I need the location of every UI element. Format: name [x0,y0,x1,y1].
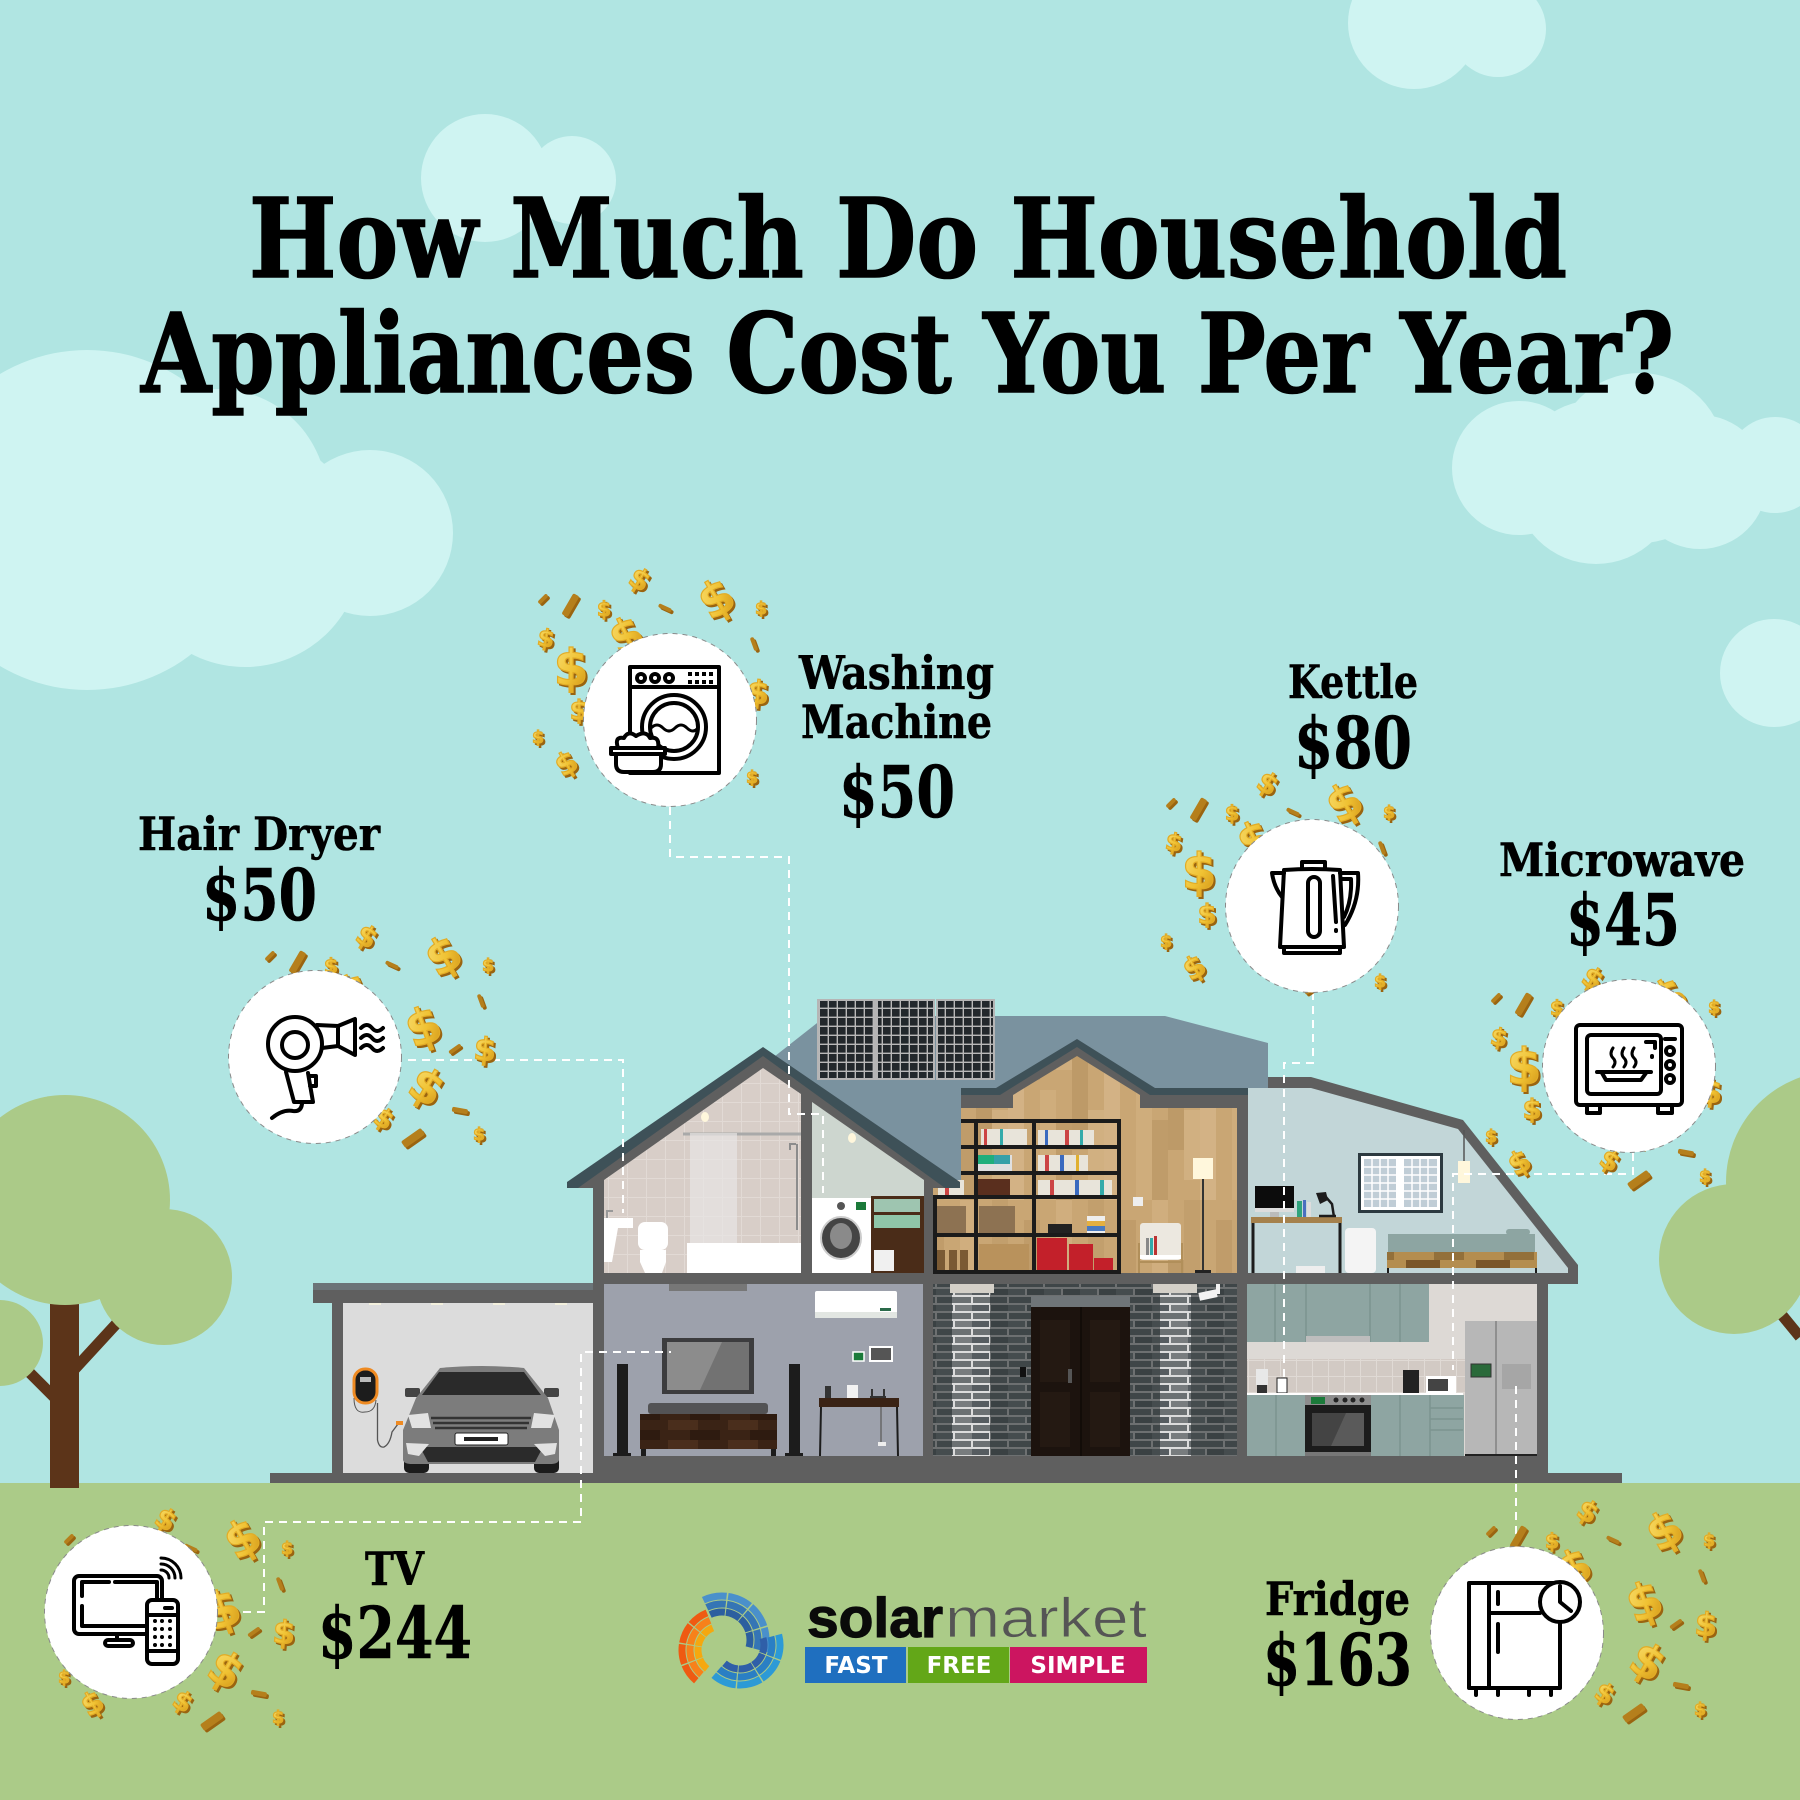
label: microwave [1499,833,1745,962]
dashed connector: washing machine [670,807,823,1193]
coin cluster: microwave: $ [1502,1143,1537,1184]
coin cluster: TV: $ [272,1708,284,1728]
air conditioner [815,1291,897,1318]
coin cluster: TV: $ [149,1500,182,1539]
label: hair dryer: Hair Dryer [138,807,381,861]
coin cluster: fridge: $ [1620,1630,1675,1693]
label: kettle: $80 [1294,701,1412,785]
bathtub [687,1243,801,1273]
logo wordmark [807,1586,1148,1649]
TV [662,1338,754,1394]
coin cluster: microwave: $ [1550,996,1564,1020]
coin cluster: kettle: $ [1251,764,1284,803]
label: washing machine: Washing [798,646,994,700]
coin cluster: TV: $ [75,1684,110,1725]
coin cluster: fridge: $ [1618,1569,1671,1635]
coin cluster: kettle: $ [1228,808,1280,871]
dashed connector: kettle [1284,992,1313,1383]
oven [1305,1395,1371,1456]
coin cluster: washing machine: $ [554,639,588,697]
floor lamp [1193,1158,1213,1273]
dashed connector: fridge [1515,1383,1517,1548]
pillar lights [950,1284,1197,1293]
coin cluster: hair dryer: $ [324,954,338,978]
house walls [593,1077,1578,1483]
security camera [1198,1284,1220,1301]
coin cluster: washing machine: $ [570,696,588,727]
door vent [1031,1296,1130,1307]
laundry shelf [871,1196,924,1273]
coin cluster: microwave: $ [1625,1097,1680,1160]
coin cluster: washing machine [532,560,771,791]
tagline bars: FAST [824,1653,888,1679]
tagline bars: SIMPLE [1030,1653,1126,1679]
logo mark [664,1582,789,1706]
coin cluster: fridge: $ [1548,1536,1600,1599]
coin cluster: fridge: $ [1502,1571,1536,1629]
label: hair dryer [138,807,381,937]
label: washing machine: Machine [801,695,992,749]
coin cluster: kettle: $ [1177,948,1212,989]
coin cluster: microwave [1485,959,1724,1190]
computer [1255,1186,1294,1217]
cloud: right small [1720,619,1800,727]
coin cluster: kettle: $ [1316,771,1373,836]
logo wordmark: solar [807,1586,943,1649]
coin cluster: microwave: $ [1641,966,1698,1031]
clouds [0,0,1800,727]
garage [313,1283,593,1473]
desk [1251,1217,1342,1273]
coin cluster: TV: $ [281,1539,293,1559]
cloud: left large [0,350,453,690]
label: hair dryer: $50 [202,853,317,937]
title [140,174,1674,418]
coin cluster: hair dryer: $ [399,1055,454,1118]
coin cluster: fridge: $ [1703,1531,1715,1551]
coin cluster: washing machine: $ [623,560,656,599]
room: library [933,1056,1237,1273]
label: TV: $244 [318,1591,472,1675]
coin cluster: washing machine: $ [688,567,745,632]
coin cluster: microwave: $ [1623,1036,1676,1102]
desk lamp [1316,1192,1336,1217]
coin cluster: washing machine: $ [600,604,652,667]
coin cluster: microwave: $ [1699,1167,1711,1187]
cloud: right [1452,373,1800,564]
room: bathroom [604,1068,801,1273]
label: microwave: Microwave [1499,833,1745,887]
brick pillars [952,1293,1191,1456]
coin cluster: hair dryer: $ [473,1125,485,1145]
coin cluster: kettle: $ [1383,803,1395,823]
ceiling light [701,1112,709,1122]
label: kettle: Kettle [1288,655,1418,709]
coin cluster: hair dryer: $ [350,917,383,956]
coin cluster: TV [58,1500,297,1731]
coin cluster: microwave: $ [1576,959,1609,998]
label: fridge: $163 [1263,1618,1412,1702]
coin cluster: microwave: $ [1698,1072,1724,1111]
coin cluster: washing machine: $ [745,673,771,712]
label: TV: TV [365,1542,425,1596]
coin cluster: fridge: $ [1694,1700,1706,1720]
coin cluster: washing machine: $ [672,698,727,761]
left gable roof [567,1047,960,1188]
coin cluster: microwave: $ [1485,1127,1497,1147]
coin cluster: microwave: $ [1507,1038,1541,1096]
counter items [1256,1369,1456,1393]
coin cluster: hair dryer: $ [368,1102,399,1137]
door bell [1020,1367,1026,1377]
coin cluster: kettle: $ [1300,902,1355,965]
coin cluster: fridge: $ [1636,1499,1693,1564]
coin cluster: TV: $ [196,1577,249,1643]
coin cluster: kettle: $ [1269,949,1300,984]
blue back roof [770,1016,1268,1190]
logo: solarmarket [664,1582,1148,1706]
coin cluster: TV: $ [198,1638,253,1701]
coin cluster: TV: $ [214,1507,271,1572]
solar panels [818,1000,994,1079]
dashed connector: microwave [1453,1153,1633,1370]
front door [1031,1307,1130,1456]
coin cluster: washing machine: $ [746,768,758,788]
fridge [1465,1321,1537,1456]
coin cluster: kettle: $ [1198,900,1216,931]
coin cluster: washing machine: $ [532,728,544,748]
icon: kettle [1226,820,1398,992]
media bench [640,1403,777,1456]
coin cluster: kettle: $ [1298,841,1351,907]
middle gable roof [961,1039,1268,1108]
house illustration [270,1000,1622,1483]
coin cluster: TV: $ [271,1613,297,1652]
ceiling light strip [669,1284,747,1291]
thermostat [853,1347,892,1361]
coin cluster: kettle: $ [1182,843,1216,901]
coin cluster: washing machine: $ [549,744,584,785]
pendant lamp [1458,1130,1470,1183]
coin cluster: washing machine: $ [670,637,723,703]
coin cluster: TV: $ [58,1668,70,1688]
speakers [613,1364,803,1456]
icon: fridge [1430,1546,1604,1720]
ground [0,1483,1800,1800]
label: washing machine [798,646,994,834]
air purifier [1345,1228,1376,1273]
label: washing machine: $50 [839,750,955,834]
coin cluster: microwave: $ [1594,1144,1625,1179]
room: brick entrance [933,1284,1237,1456]
coin cluster: kettle [1160,764,1399,995]
label: kettle [1288,655,1418,785]
tagline bars: FREE [927,1653,991,1679]
side table [819,1385,899,1456]
coin cluster: washing machine: $ [755,599,767,619]
cloud: top right [1348,0,1546,89]
coin cluster: microwave: $ [1708,998,1720,1018]
coin cluster: washing machine: $ [641,745,672,780]
coin cluster: fridge [1485,1492,1719,1723]
small book stack [1296,1266,1325,1273]
coin cluster: hair dryer: $ [397,994,450,1060]
logo wordmark: market [945,1586,1148,1649]
coin cluster: TV: $ [167,1685,198,1720]
upper cabinets [1247,1284,1429,1342]
icon: TV and remote [44,1526,218,1698]
window [1358,1153,1443,1213]
coin cluster: hair dryer: $ [327,961,379,1024]
icon: washing machine [584,634,756,806]
coin cluster: fridge: $ [1545,1529,1559,1553]
armchair [1139,1223,1182,1273]
coin cluster: kettle: $ [1160,932,1172,952]
room: kitchen [1247,1284,1537,1456]
EV charger [354,1369,403,1447]
desk books [1297,1200,1311,1217]
toilet [638,1222,668,1273]
car [403,1366,559,1473]
bed [1387,1229,1537,1273]
washing machine [812,1198,871,1273]
shower curtain [683,1133,801,1248]
dashed connector: hair dryer [408,1060,623,1213]
coin cluster: kettle: $ [1163,827,1185,858]
coin cluster: microwave: $ [1488,1022,1510,1053]
coin cluster: hair dryer: $ [415,924,472,989]
wall switch [1133,1197,1143,1206]
label: TV [318,1542,472,1675]
coin cluster: fridge: $ [1589,1677,1620,1712]
coin cluster: hair dryer: $ [472,1030,498,1069]
coin cluster: kettle: $ [1225,801,1239,825]
tree: left [0,1095,232,1488]
icon: hair dryer [228,970,402,1144]
coin cluster: fridge: $ [1571,1492,1604,1531]
cloud: behind title [421,114,616,242]
tree: right [1659,1071,1800,1337]
room: laundry [812,1102,924,1273]
title: How Much Do Household [249,174,1567,303]
bookshelf [933,1121,1121,1273]
room: living room [604,1284,923,1456]
coin cluster: microwave: $ [1553,1003,1605,1066]
coin cluster: kettle: $ [1374,972,1386,992]
ground slab [270,1473,1622,1483]
coin cluster: washing machine: $ [597,597,611,621]
tagline bars [805,1647,1147,1683]
lower cabinets [1247,1393,1464,1456]
dashed connector: TV [215,1352,671,1612]
coin cluster: hair dryer: $ [482,956,494,976]
coin cluster: microwave: $ [1523,1095,1541,1126]
garage lights [369,1303,567,1305]
coin cluster: hair dryer [264,917,498,1148]
backsplash [1247,1359,1465,1393]
label: fridge [1263,1572,1412,1702]
icon: microwave [1542,980,1716,1152]
coin cluster: fridge: $ [1693,1605,1719,1644]
sink [604,1211,633,1262]
coin cluster: washing machine: $ [535,623,557,654]
coin cluster: kettle: $ [1373,877,1399,916]
label: microwave: $45 [1566,878,1680,962]
room: bedroom / office [1248,1088,1568,1273]
label: fridge: Fridge [1265,1572,1410,1626]
